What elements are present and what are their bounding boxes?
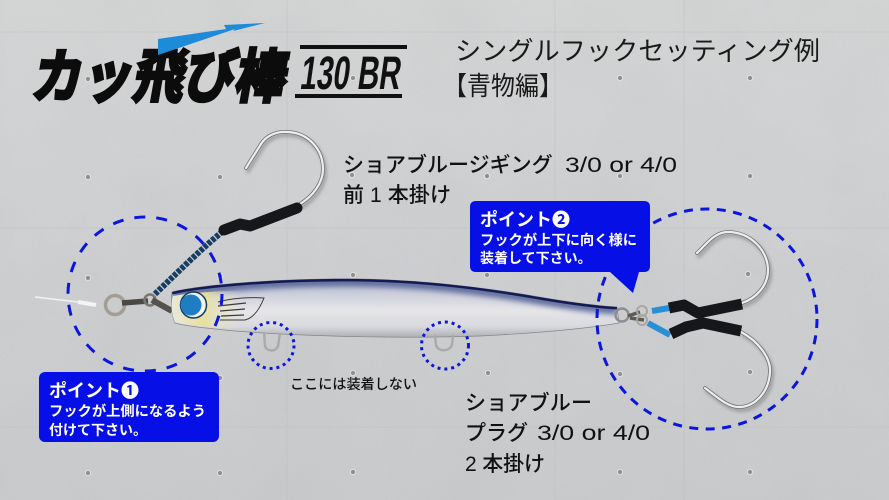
tail ring [616, 308, 628, 322]
leader line and rings [35, 294, 172, 314]
rear rings [628, 312, 644, 320]
callout: point 1: フックが上側になるよう [49, 403, 206, 419]
label: front hook: 3/0 or 4/0 [565, 154, 677, 177]
logo wordmark: カッ飛び棒 [28, 45, 293, 110]
logo: カッ飛び棒 130BR [28, 23, 407, 110]
lure eye [180, 292, 206, 318]
upper tube [669, 304, 742, 313]
label: rear hooks: プラグ [465, 422, 528, 445]
lure back colour [172, 279, 617, 310]
front assist hook [155, 132, 325, 294]
callout: point 1: 付けて下さい。 [49, 422, 147, 438]
dotted circle: front belly eye [248, 322, 294, 368]
blue wraps [652, 308, 669, 311]
callout: point 2 [470, 201, 650, 293]
dashed circle: point 1 [68, 217, 222, 371]
logo model number [295, 45, 407, 100]
lower hook [705, 332, 772, 410]
label: front hook [343, 153, 677, 207]
dotted circle: rear belly eye [422, 322, 468, 369]
label: do not attach here: ここには装着しない [290, 376, 417, 392]
lure fin [218, 298, 264, 320]
dashed circle: point 2 [597, 209, 817, 429]
label: rear hooks: 3/0 or 4/0 [537, 422, 650, 445]
heading: setting example [443, 36, 820, 101]
label: front hook: 前 1 本掛け [343, 184, 451, 207]
heat-shrink tube [224, 208, 297, 230]
callout: point 1 [39, 372, 219, 442]
rear double hooks [628, 232, 772, 410]
label: rear hooks [465, 391, 650, 476]
label: rear hooks: ショアブルー [465, 391, 592, 415]
lure body [171, 279, 628, 337]
callout: point 2: フックが上下に向く様に [480, 232, 637, 248]
logo swoosh [158, 23, 265, 55]
label: front hook: ショアブルージギング [343, 153, 553, 177]
belly hook eye: rear [435, 335, 453, 350]
callout: point 2: 装着して下さい。 [480, 250, 592, 266]
callout: point 1: ポイント❶ [49, 380, 139, 401]
label: rear hooks: 2 本掛け [465, 453, 545, 476]
heading: setting example: シングルフックセッティング例 [455, 36, 820, 66]
lure head [172, 291, 240, 329]
heading: setting example: 【青物編】 [443, 71, 563, 101]
belly hook eye: front [264, 332, 280, 350]
logo model number: 130 BR [297, 47, 405, 100]
braided assist line [155, 232, 222, 294]
callout: point 2: ポイント❷ [480, 209, 570, 230]
upper hook [697, 232, 770, 306]
lower tube [671, 323, 741, 334]
